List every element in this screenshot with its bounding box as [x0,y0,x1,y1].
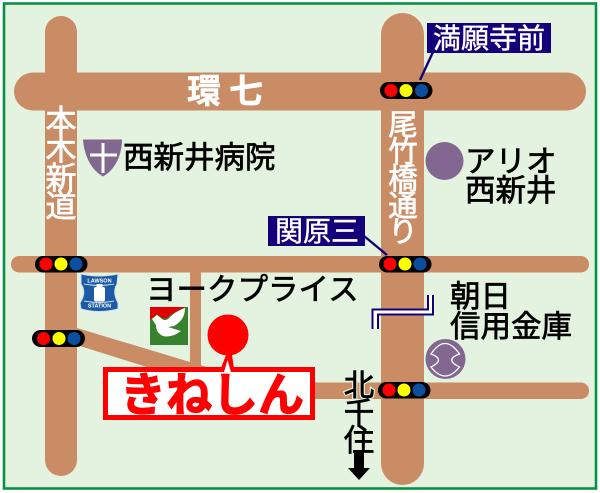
road label: 本木新道: 木 [46,132,76,167]
callout: 関原三 [268,216,387,255]
icon: Ario circle [426,142,464,180]
icon: hospital shield [83,140,122,176]
callout: 満願寺前 [420,23,551,80]
icon: Lawson Station [80,274,118,312]
road label: 本木新道: 新 [46,161,76,196]
icon: York Price logo [150,307,188,345]
icon: Lawson Station: LAWSON [87,278,112,284]
road label: 尾竹橋通り [388,109,418,249]
label: アリオ西新井: 西新井 [465,174,556,208]
road label: 尾竹橋通り: 橋 [388,163,418,196]
icon: Asahi bank logo [426,339,466,379]
traffic light: middle left [35,256,88,272]
marker: destination pin [208,314,248,368]
road label: 尾竹橋通り: 尾 [388,109,418,142]
arrow: toward Kita-Senju [348,451,370,480]
label: 朝日信用金庫: 朝日 [450,280,511,314]
road label: 尾竹橋通り: 通 [388,190,418,223]
callout: 満願寺前: 満願寺前 [433,23,545,54]
icon: Lawson Station: STATION [88,304,111,310]
road label: 環七: 環 [187,73,221,111]
road label: 環七 [187,73,263,111]
traffic light: top right [380,82,432,99]
label: 朝日信用金庫: 信用金庫 [450,310,572,344]
road label: 本木新道 [46,104,76,224]
road label: 尾竹橋通り: り [388,216,418,249]
label: ヨークプライス: ヨークプライス [146,273,359,307]
label: 北千住: 住 [344,424,374,458]
road label: 本木新道: 本 [46,104,76,139]
label: 北千住: 北 [344,369,374,403]
callout: 関原三: 関原三 [275,216,359,247]
label: 朝日信用金庫 [450,280,572,344]
traffic light: lower right [378,382,430,398]
label: 西新井病院: 西新井病院 [123,141,276,175]
label: 北千住: 千 [344,397,374,431]
label: 北千住: 北 [344,369,374,403]
label: アリオ西新井: アリオ [465,145,556,179]
label: アリオ西新井 [465,145,556,208]
road label: 尾竹橋通り: 竹 [388,136,418,169]
railway line [372,295,433,329]
label: 北千住 [344,369,374,458]
road label: 環七: 七 [229,73,263,111]
road label: 本木新道: 道 [46,189,76,224]
label: きねしん: きねしん [120,369,304,421]
traffic light: lower left [32,330,85,347]
traffic light: middle right [379,256,432,272]
